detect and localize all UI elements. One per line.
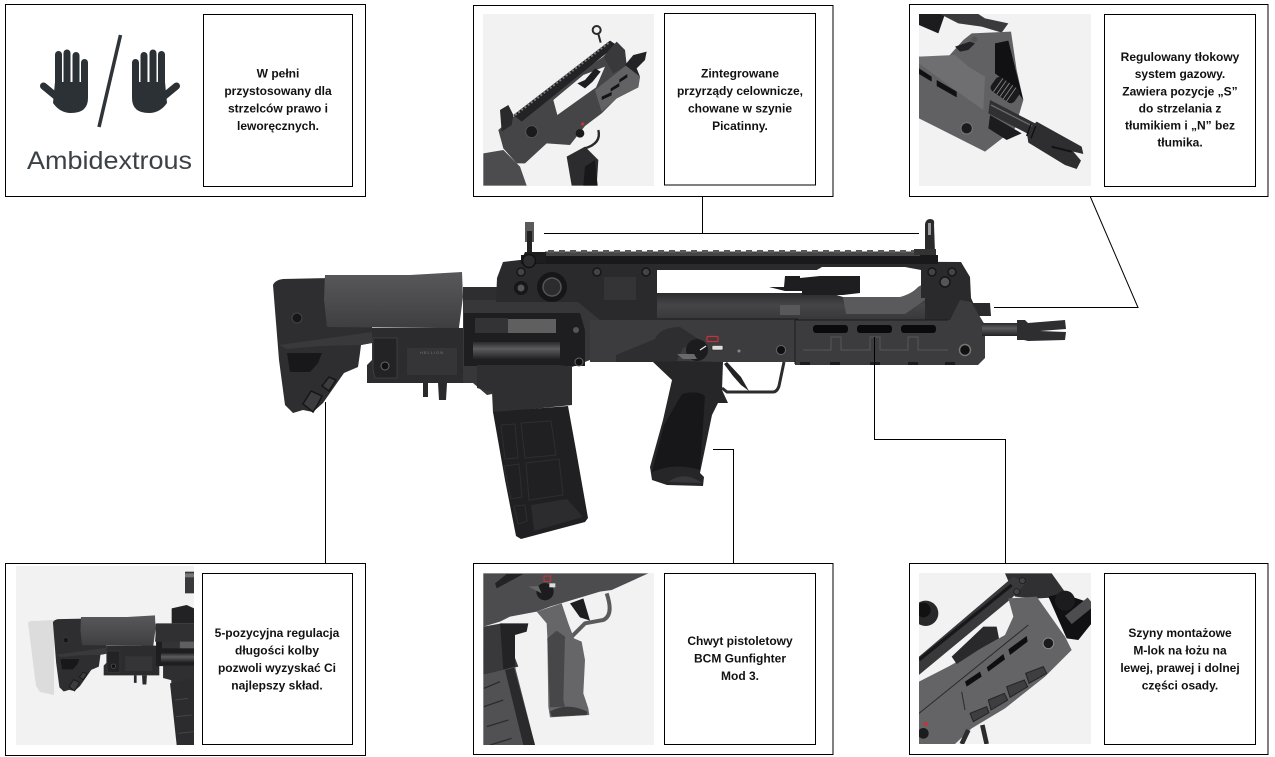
lower receiver: [367, 287, 500, 400]
stock: [273, 278, 372, 413]
caption text: Mod 3.: [721, 669, 759, 683]
rifle marking: HELLION: [420, 350, 444, 355]
caption box: [664, 574, 816, 744]
caption text: tłumikiem i „N” bez: [1125, 118, 1235, 132]
central body: [463, 283, 970, 395]
panel: gas system: [910, 4, 1268, 196]
flip-up optic mount: [769, 276, 860, 295]
top carry rail: [496, 250, 981, 320]
panel: sights: [474, 6, 833, 196]
leader: gas system: [994, 196, 1138, 308]
caption text: części osady.: [1142, 678, 1218, 692]
caption text: leworęcznych.: [237, 119, 319, 133]
icon: left hand: [44, 53, 88, 113]
trigger and guard: [722, 362, 784, 392]
caption box: [1104, 14, 1256, 186]
leader: M-lok: [874, 337, 1006, 563]
caption text: przystosowany dla: [224, 84, 332, 98]
screws and controls: [514, 268, 956, 361]
caption text: Zintegrowane: [701, 66, 779, 80]
flash hider: [1017, 320, 1066, 341]
rail window: [657, 267, 921, 297]
pistol grip: [650, 361, 728, 486]
caption text: BCM Gunfighter: [694, 652, 786, 666]
panel: stock: [6, 564, 366, 756]
magazine: [493, 406, 588, 539]
caption text: długości kolby: [235, 644, 319, 658]
photo: muzzle: [919, 14, 1091, 186]
caption text: lewej, prawej i dolnej: [1120, 661, 1240, 675]
caption text: tłumika.: [1157, 136, 1203, 150]
ejection port: [464, 313, 585, 366]
panel: grip: [474, 564, 833, 754]
magazine well: [477, 365, 572, 413]
panel: ambidextrous: [6, 4, 366, 196]
caption box: [1104, 574, 1256, 744]
gas adjustment knob: [973, 303, 991, 316]
caption text: Szyny montażowe: [1128, 626, 1232, 640]
caption text: strzelców prawo i: [228, 102, 328, 116]
caption text: Picatinny.: [712, 119, 768, 133]
caption text: chowane w szynie: [688, 102, 792, 116]
caption text: 5-pozycyjna regulacja: [215, 626, 340, 640]
caption text: system gazowy.: [1135, 67, 1225, 81]
rifle main image: [273, 219, 1066, 539]
caption text: W pełni: [257, 66, 299, 80]
caption text: M-lok na łożu na: [1133, 644, 1227, 658]
photo: grip: [483, 573, 654, 745]
caption text: Regulowany tłokowy: [1121, 50, 1240, 64]
photo: handguard: [913, 573, 1092, 744]
caption text: do strzelania z: [1139, 102, 1221, 116]
M-lok handguard: [795, 300, 985, 365]
caption text: Zawiera pozycje „S”: [1122, 84, 1238, 98]
caption text: przyrządy celownicze,: [677, 84, 803, 98]
panel: M-lok rails: [910, 564, 1268, 754]
caption box: [204, 14, 352, 186]
photo: rifle rotated: [483, 14, 654, 186]
caption text: Chwyt pistoletowy: [687, 634, 793, 648]
barrel: [982, 323, 1020, 336]
caption text: pozwoli wyzyskać Ci: [218, 661, 336, 675]
retractable front sight: [914, 219, 936, 255]
caption box: [664, 14, 816, 185]
caption box: [202, 574, 352, 744]
icon: slash: [99, 35, 120, 127]
leader: stock: [324, 402, 326, 563]
icon: right hand: [132, 53, 176, 113]
photo: stock: [16, 566, 194, 745]
brand word: Ambidextrous: [27, 147, 192, 175]
leader: sights: [544, 196, 919, 234]
retractable rear sight: [520, 222, 546, 268]
leader: grip: [713, 450, 734, 563]
stock cheek piece: [324, 272, 463, 338]
caption text: najlepszy skład.: [231, 678, 323, 692]
